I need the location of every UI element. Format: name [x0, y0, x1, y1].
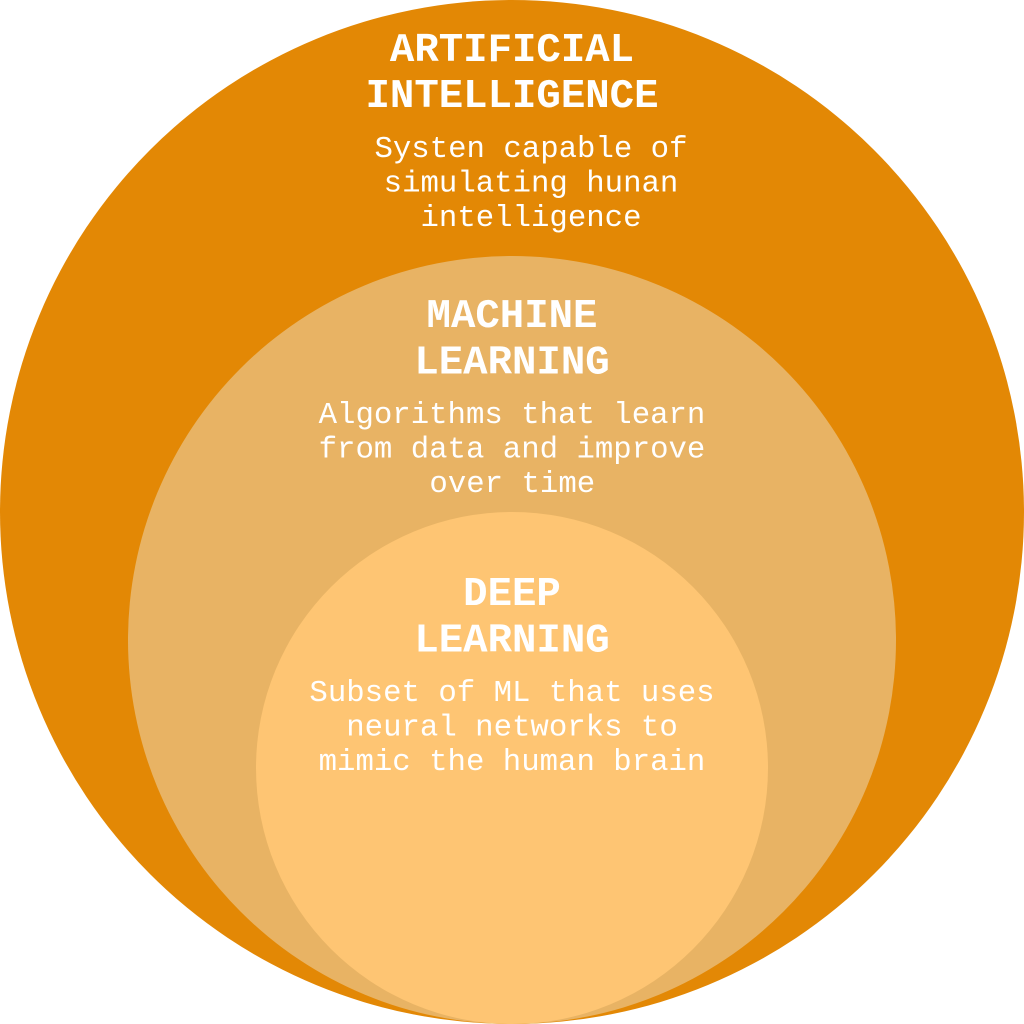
heading: machine learning: LEARNING	[414, 340, 610, 386]
text block: machine learning description: from data and improve	[319, 432, 705, 468]
panel: machine learning circle	[128, 256, 896, 1024]
heading: machine learning	[414, 294, 610, 386]
heading: deep learning	[414, 572, 610, 664]
text block: artificial intelligence description: intelligence	[420, 201, 642, 236]
text block: artificial intelligence description: Systen capable of	[374, 132, 688, 167]
heading: deep learning: DEEP	[463, 572, 561, 618]
text block: artificial intelligence description	[374, 132, 688, 236]
heading: artificial intelligence: INTELLIGENCE	[366, 74, 658, 120]
panel: deep learning circle	[256, 512, 768, 1024]
text block: machine learning description: Algorithms that learn	[319, 398, 705, 433]
text block: deep learning description	[309, 676, 715, 780]
text block: deep learning description: mimic the human brain	[319, 745, 705, 780]
heading: machine learning: MACHINE	[427, 294, 597, 340]
heading: deep learning: LEARNING	[414, 618, 610, 664]
heading: artificial intelligence: ARTIFICIAL	[390, 28, 634, 74]
text block: artificial intelligence description: simulating hunan	[384, 166, 678, 202]
text block: deep learning description: Subset of ML that uses	[309, 676, 715, 711]
text block: deep learning description: neural networks to	[346, 710, 678, 746]
heading: artificial intelligence	[366, 28, 658, 120]
text block: machine learning description	[319, 398, 705, 502]
text block: machine learning description: over time	[429, 467, 595, 502]
